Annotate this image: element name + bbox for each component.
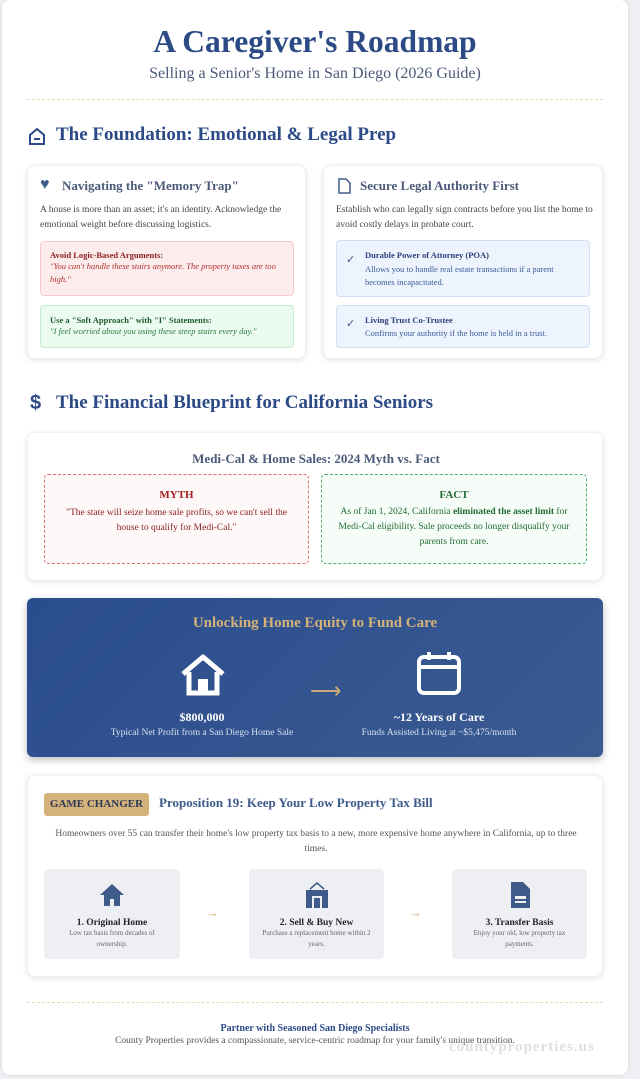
callout: POA	[336, 240, 590, 297]
icon: house	[181, 654, 225, 696]
callout: avoid	[40, 241, 294, 296]
footer: Partner with Seasoned San Diego Specialists	[220, 1023, 410, 1034]
stat: years	[362, 710, 516, 738]
callout: trust: Living Trust Co-Trustee	[365, 315, 453, 325]
step 1: 1. Original Home	[77, 918, 147, 928]
fact box	[321, 474, 587, 564]
panel: legal authority: Secure Legal Authority First	[360, 178, 519, 193]
badge: GAME CHANGER	[50, 798, 143, 810]
callout: soft approach	[40, 305, 294, 348]
myth box	[44, 474, 309, 564]
callout: avoid: "You can't handle these stairs anymore. The property taxes are too high."	[50, 261, 276, 284]
stat: net profit: Typical Net Profit from a San Diego Home Sale	[111, 728, 293, 738]
section heading: financial: The Financial Blueprint for California Seniors	[56, 392, 433, 413]
panel: prop 19: Proposition 19: Keep Your Low Property Tax Bill	[159, 795, 433, 810]
step 2: 2. Sell & Buy New	[280, 918, 353, 928]
arrow: →	[409, 905, 422, 920]
watermark: countyproperties.us	[449, 1039, 595, 1055]
myth box: MYTH	[159, 489, 194, 501]
stat: net profit: $800,000	[180, 710, 224, 724]
panel: legal authority	[323, 165, 603, 359]
title: A Caregiver's Roadmap	[153, 24, 477, 59]
callout: POA: Allows you to handle real estate transactions if a parent becomes incapacitated.	[365, 264, 554, 287]
callout: avoid: Avoid Logic-Based Arguments:	[50, 250, 163, 260]
callout: POA: Durable Power of Attorney (POA)	[365, 250, 489, 260]
stat: years: ~12 Years of Care	[394, 710, 484, 724]
callout: trust: ✓	[346, 318, 355, 330]
callout: trust: Confirms your authority if the home is held in a trust.	[365, 328, 547, 338]
stat: years: Funds Assisted Living at ~$5,475/month	[362, 728, 516, 738]
panel: home equity	[27, 598, 603, 757]
section heading: foundation: The Foundation: Emotional & Legal Prep	[56, 124, 396, 145]
myth box: "The state will seize home sale profits, so we can't sell the house to qualify for Medi-Cal."	[66, 508, 287, 533]
step 3: 3. Transfer Basis	[486, 918, 553, 928]
panel: legal authority: Establish who can legally sign contracts before you list the home to avoid costly delays in probate court.	[336, 205, 593, 230]
footer: County Properties provides a compassionate, service-centric roadmap for your family's unique transition.	[115, 1036, 515, 1046]
panel: memory trap: Navigating the "Memory Trap"	[62, 178, 239, 193]
icon: heart: ♥	[40, 176, 50, 193]
step 2	[249, 869, 384, 959]
subtitle: Selling a Senior's Home in San Diego (2026 Guide)	[149, 65, 481, 82]
step 1	[44, 869, 180, 959]
panel: prop 19: Homeowners over 55 can transfer their home's low property tax basis to a new, more expensive home anywhere in California, up to three times.	[55, 829, 577, 854]
panel: myth vs fact: Medi-Cal & Home Sales: 2024 Myth vs. Fact	[192, 451, 440, 466]
footer	[115, 1023, 515, 1046]
icon: calendar	[417, 652, 461, 695]
callout: POA: ✓	[346, 254, 355, 266]
icon: document	[338, 178, 351, 194]
panel: memory trap: A house is more than an asset; it's an identity. Acknowledge the emotional weight before discussing logistics.	[40, 205, 281, 230]
icon: home	[29, 128, 45, 145]
badge	[44, 793, 149, 816]
arrow: →	[206, 905, 219, 920]
callout: soft approach: "I feel worried about you using these steep stairs every day."	[50, 326, 257, 336]
step 3: Enjoy your old, low property tax payments.	[474, 929, 565, 948]
arrow: ⟶	[310, 678, 342, 703]
fact box: As of Jan 1, 2024, California eliminated the asset limit for Medi-Cal eligibility. Sale proceeds no longer disqualify your parents from care.	[338, 507, 570, 547]
fact box: FACT	[439, 489, 469, 501]
callout: soft approach: Use a "Soft Approach" with "I" Statements:	[50, 315, 212, 325]
stat: net profit	[110, 710, 293, 738]
step 1: Low tax basis from decades of ownership.	[69, 929, 155, 948]
panel: myth vs fact	[27, 432, 603, 581]
step 3	[452, 869, 587, 959]
icon: dollar: $	[30, 392, 41, 414]
panel: home equity: Unlocking Home Equity to Fund Care	[193, 615, 437, 631]
panel: prop 19	[27, 775, 603, 977]
callout: trust	[336, 305, 590, 348]
step 2: Purchase a replacement home within 2 years.	[262, 929, 371, 948]
panel: memory trap	[27, 165, 306, 359]
